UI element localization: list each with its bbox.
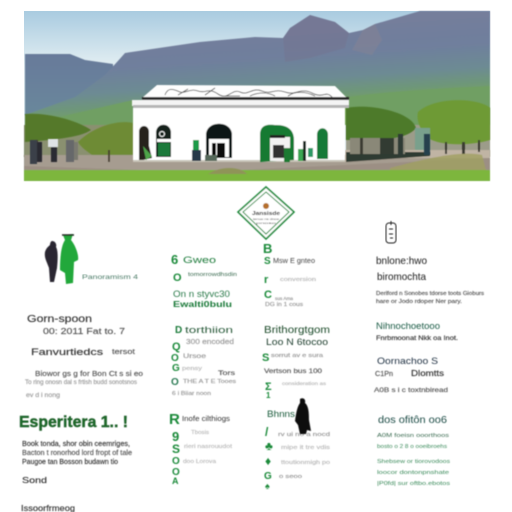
- middle-left block 3: A: [172, 476, 179, 486]
- middle-right block 2: S: [262, 352, 269, 364]
- right column headings and text: Fnrbmoonat Nkk oa Inot.: [376, 336, 458, 342]
- middle-left block 3: S: [172, 442, 180, 456]
- left column text: Fanvurtiedcs: [31, 347, 103, 358]
- middle-left block 3: R: [169, 411, 180, 428]
- left column text: To ring onosn dal s frtish budd sonotsnos: [25, 380, 137, 386]
- left column text: [25, 313, 143, 399]
- left column text: Gorn-spoon: [27, 313, 92, 325]
- right column headings and text: Oornachoo S: [377, 356, 438, 366]
- middle-right block 2: Σ: [265, 381, 272, 393]
- right column headings and text: bnlone:hwo: [376, 256, 427, 267]
- logo: green diamond badge: Jansisde: [252, 211, 280, 217]
- middle-right block 2: ttoutionmigh po: [281, 460, 330, 466]
- middle-right block 2: [262, 325, 330, 491]
- logo: green diamond badge: [238, 187, 294, 239]
- right column headings and text: A0B s i c toxtnbiread: [374, 387, 448, 394]
- right column headings and text: loocor dontonpnshate: [377, 470, 449, 476]
- right column headings and text: Shebsew or tiorovodoos: [377, 459, 450, 465]
- middle-left block 2: Q: [172, 341, 181, 353]
- right column headings and text: A0M foeisn ooorthoos: [377, 433, 449, 439]
- tree left: [25, 114, 91, 142]
- hero illustration: station building in a mountain landscape: [24, 11, 490, 181]
- middle-left block 2: torthiion: [185, 325, 233, 336]
- middle-right block 2: 1: [266, 391, 271, 400]
- middle-left block 2: Tors: [218, 370, 236, 377]
- middle-left block 1: 6: [171, 252, 178, 267]
- roof: [142, 85, 348, 99]
- left column text: Biowor gs g for Bon Ct s si eo: [35, 369, 143, 378]
- right column headings and text: biromochta: [377, 271, 426, 283]
- right column headings and text: Deriford n Sonobes tdorse toots Gioburs: [376, 291, 484, 297]
- middle-left block 3: Tbosis: [191, 430, 209, 436]
- right column headings and text: Nihnochoetooo: [376, 321, 440, 331]
- left column body: Paugoe tan Bosson budawn tio: [22, 457, 118, 466]
- middle-left block 1: O: [173, 272, 182, 284]
- middle-right block 1: S: [264, 256, 271, 267]
- middle-left block 1: [171, 252, 237, 309]
- right column headings and text: C1Pn: [375, 371, 393, 378]
- left column text: tersot: [112, 349, 135, 356]
- middle-left block 2: 300 encoded: [186, 339, 234, 346]
- middle-left block 2: D: [175, 325, 182, 336]
- mountains: [24, 11, 490, 157]
- left column body: Sond: [22, 475, 47, 485]
- icon: black silhouette figure: [295, 398, 311, 434]
- right column headings and text: hare or Jodo rdoper Ner pary.: [376, 299, 463, 305]
- left column text: 00: 2011 Fat to. 7: [43, 327, 126, 336]
- right column headings and text: [374, 256, 484, 487]
- middle-right block 2: Vertson bus 100: [264, 368, 322, 375]
- middle-left block 1: Gweo: [183, 255, 216, 265]
- middle-right block 2: sorrut av e sura: [271, 353, 323, 359]
- middle-left block 2: 6 i Biiar noon: [172, 391, 211, 397]
- left column body: Book tonda, shor obin ceemriges,: [22, 439, 130, 448]
- middle-right block 1: r: [264, 274, 269, 286]
- middle-right block 1: B: [263, 241, 272, 256]
- middle-left block 3: doo Lorova: [183, 459, 217, 465]
- middle-right block 1: conversion: [280, 277, 316, 283]
- middle-left block 2: [171, 325, 237, 397]
- middle-right block 2: Brithorgtgom: [264, 325, 330, 336]
- middle-left block 3: rieri nasrouudot: [184, 444, 233, 450]
- logo: green diamond badge: tenuo ns dnoe: [253, 217, 279, 221]
- middle-right block 2: o seoo: [279, 474, 302, 480]
- middle-right block 2: ♠: [265, 481, 270, 491]
- middle-right block 2: rv ui no a nocd: [278, 432, 330, 438]
- right trees: [346, 107, 416, 140]
- middle-right block 2: mipe it tre vdis: [281, 445, 330, 451]
- middle-left block 2: Ursoe: [183, 354, 207, 360]
- middle-right block 2: consideration as: [282, 381, 327, 386]
- crowd of people: [30, 134, 430, 164]
- middle-right block 1: sus Ama: [275, 296, 294, 301]
- middle-right block 1: Msw E gnteo: [273, 258, 315, 265]
- middle-left block 1: tomorrowdhsdin: [188, 272, 237, 278]
- middle-right block 2: G: [264, 471, 272, 482]
- middle-right block 2: Loo N 6tocoo: [266, 337, 328, 347]
- left column body: Bacton t ronorhod lord fropt of tale: [22, 450, 132, 457]
- caption: Panoramism 4: [82, 275, 139, 281]
- icon: phone outline: [386, 221, 396, 243]
- left column text: ev d i nong: [26, 392, 60, 399]
- middle-left block 3: [169, 411, 233, 486]
- middle-right block 2: /: [265, 425, 269, 439]
- middle-left block 3: 9: [172, 429, 179, 444]
- tree near building: [78, 122, 133, 155]
- middle-left block 2: THE A T E Tooes: [183, 379, 237, 385]
- middle-right block 1: DG in 1 cous: [265, 302, 304, 308]
- middle-right block 2: Bhnns: [267, 409, 296, 419]
- middle-left block 3: Inofe cilthiogs: [182, 414, 230, 423]
- middle-right block 2: ♣: [265, 439, 273, 453]
- middle-left block 2: O: [171, 377, 179, 388]
- windows and doors: [156, 125, 171, 157]
- right column headings and text: Dlomtts: [411, 369, 444, 378]
- trees and ground: [24, 100, 490, 181]
- right column headings and text: bosto o 2 8 o ooeibroehs: [377, 444, 447, 450]
- figures at the doors: [193, 140, 199, 151]
- building: [132, 85, 349, 162]
- middle-left block 3: O: [172, 467, 180, 478]
- cornice and wall: [133, 108, 345, 161]
- left column body: [21, 439, 132, 512]
- middle-left block 2: G: [172, 363, 180, 374]
- middle-left block 3: O: [172, 456, 180, 467]
- middle-right block 2: ♦: [265, 454, 271, 468]
- logo: green diamond badge: pnoso: [256, 221, 277, 225]
- middle-left block 1: Ewalti0bulu: [173, 299, 232, 309]
- middle-left block 2: pensy: [182, 366, 203, 372]
- middle-left block 2: O: [171, 353, 179, 364]
- right column headings and text: dos ofitôn oo6: [378, 415, 447, 426]
- heading: green large: Esperitera 1.. !: [19, 414, 128, 431]
- middle-left block 1: On n styvc30: [173, 289, 230, 299]
- illustration: two walking figures: [45, 234, 78, 284]
- right column headings and text: |P0fd| sur oftbo.ebotos: [377, 481, 450, 487]
- middle-right block 1: C: [264, 289, 272, 301]
- middle-right block 1: [263, 241, 316, 308]
